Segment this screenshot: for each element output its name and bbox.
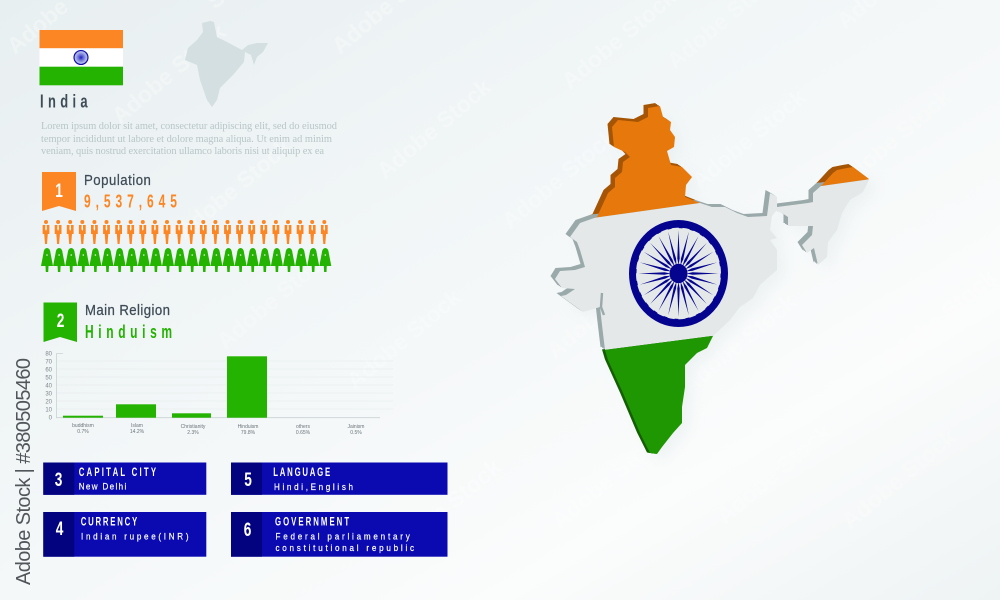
watermark pattern: Adobe Stock (372, 73, 496, 184)
watermark pattern: Adobe Stock (547, 423, 671, 534)
green side (602, 336, 712, 454)
bar chart: religions: others (296, 424, 310, 430)
card 5: language: LANGUAGE (273, 467, 330, 480)
population value: 9,537,645 (84, 192, 177, 212)
description text (41, 121, 338, 157)
watermark pattern: Adobe Stock (542, 253, 666, 364)
ashoka chakra (632, 224, 724, 323)
population heading: Population (84, 171, 151, 188)
pictogram: female row (41, 248, 331, 272)
card 4: currency: 4 (56, 518, 64, 540)
section 2: main religion (44, 301, 172, 343)
watermark pattern: Adobe Stock (212, 243, 336, 354)
card 4: currency: CURRENCY (81, 516, 137, 529)
card 3: capital city: New Delhi (79, 481, 126, 492)
bar chart: religions: 80 (45, 352, 53, 358)
white band side (550, 180, 867, 349)
saffron face (594, 106, 869, 218)
card 6: government: 6 (244, 519, 251, 541)
watermark pattern: Adobe Stock (107, 18, 231, 129)
card 3: capital city: 3 (55, 469, 62, 491)
saffron side (590, 103, 868, 215)
watermark pattern: Adobe Stock (382, 453, 506, 564)
card 3: capital city: CAPITAL CITY (79, 467, 156, 480)
map shadow (562, 112, 876, 460)
mini locator map (185, 21, 268, 107)
watermark pattern: Adobe Stock (832, 83, 956, 194)
ribbon 1: 1 (55, 180, 63, 202)
card 5: language (231, 462, 448, 495)
bar chart: religions: Jainism (348, 424, 364, 430)
white face (555, 179, 869, 350)
stock id side text: Adobe Stock | #380505460 (13, 358, 35, 585)
card 5: language: 5 (244, 469, 252, 491)
country name: India (40, 92, 88, 112)
bar chart: religions: buddhism (72, 423, 94, 429)
bar chart: religions: 0.65% (296, 430, 311, 436)
bar chart: religions: 79.8% (241, 430, 256, 436)
card 6: government: GOVERNMENT (275, 516, 350, 529)
watermark pattern: Adobe Stock (497, 123, 621, 234)
gulf side strip (601, 293, 604, 315)
watermark pattern: Adobe Stock (677, 288, 801, 399)
section 1: population (42, 171, 177, 212)
bar chart: religions: Islam (131, 423, 143, 429)
ribbon 2: 2 (57, 310, 64, 332)
bar chart: religions: 30 (45, 392, 53, 398)
watermark pattern: Adobe Stock (342, 283, 466, 394)
3D map of India in flag colours (550, 103, 876, 460)
card 6: government: constitutional republic (276, 542, 415, 553)
watermark pattern: Adobe Stock (712, 418, 836, 529)
religion heading: Main Religion (85, 301, 170, 318)
bar chart: religions: 70 (45, 360, 53, 366)
green face (605, 336, 714, 454)
bar chart: religions: Christianity (181, 424, 206, 430)
bar chart: religions: 20 (45, 400, 53, 406)
bar chart: religions (45, 352, 393, 436)
bar chart: religions: 0 (49, 416, 53, 422)
watermark pattern: Adobe Stock (172, 133, 296, 244)
flag of India (40, 30, 123, 85)
description text: Lorem ipsum dolor sit amet, consectetur adipiscing elit, sed do eiusmod (41, 121, 338, 132)
bar chart: religions: 10 (45, 408, 53, 414)
bar chart: religions: 50 (45, 376, 53, 382)
bar chart: religions: 60 (45, 368, 53, 374)
card 4: currency (43, 512, 206, 557)
bar chart: religions: 14.2% (130, 429, 145, 435)
bar chart: religions: 2.3% (187, 430, 199, 436)
watermark pattern: Adobe Stock (877, 263, 1000, 374)
card 4: currency: Indian rupee(INR) (81, 531, 189, 542)
card 5: language: Hindi,English (274, 481, 353, 492)
bar chart: religions: 0.7% (77, 429, 89, 435)
watermark pattern: Adobe Stock (687, 83, 811, 194)
religion value: Hinduism (85, 323, 172, 343)
card 6: government (231, 512, 448, 557)
watermark pattern: Adobe Stock (837, 423, 961, 534)
description text: veniam, quis nostrud exercitation ullamco laboris nisi ut aliquip ex ea (41, 146, 324, 157)
bar chart: religions: 0.5% (350, 430, 362, 436)
description text: tempor incididunt ut labore et dolore magna aliqua. Ut enim ad minim (41, 134, 332, 145)
bar chart: religions: Hinduism (238, 424, 258, 430)
bar chart: religions: 40 (45, 384, 53, 390)
card 3: capital city (43, 462, 206, 495)
pictogram: male row (43, 220, 328, 244)
card 6: government: Federal parliamentary (276, 531, 410, 542)
